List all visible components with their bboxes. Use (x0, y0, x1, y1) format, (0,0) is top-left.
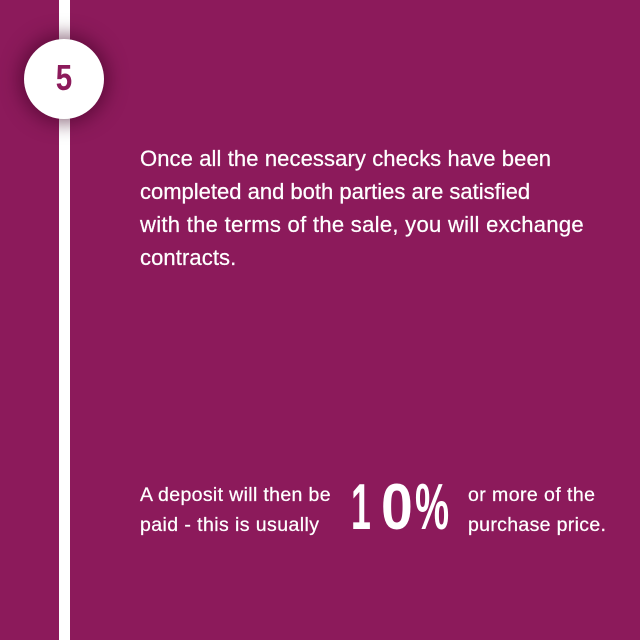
main paragraph: completed and both parties are satisfied (140, 179, 530, 204)
10 percent figure: % (415, 470, 449, 543)
main paragraph: contracts. (140, 245, 236, 270)
main paragraph: Once all the necessary checks have been (140, 146, 551, 171)
deposit text left: A deposit will then be (140, 484, 331, 506)
step number badge (24, 39, 104, 119)
10 percent figure: 0 (381, 470, 413, 543)
deposit text right: purchase price. (468, 514, 606, 536)
timeline line (59, 0, 70, 640)
deposit text left (140, 484, 331, 536)
deposit text left: paid - this is usually (140, 514, 319, 536)
step number: 5 (56, 57, 72, 98)
main paragraph: with the terms of the sale, you will exchange (140, 212, 584, 237)
main paragraph (140, 146, 584, 270)
deposit text right (468, 484, 606, 536)
10 percent figure: 1 (351, 470, 371, 543)
10 percent figure (351, 470, 449, 543)
deposit text right: or more of the (468, 484, 595, 506)
